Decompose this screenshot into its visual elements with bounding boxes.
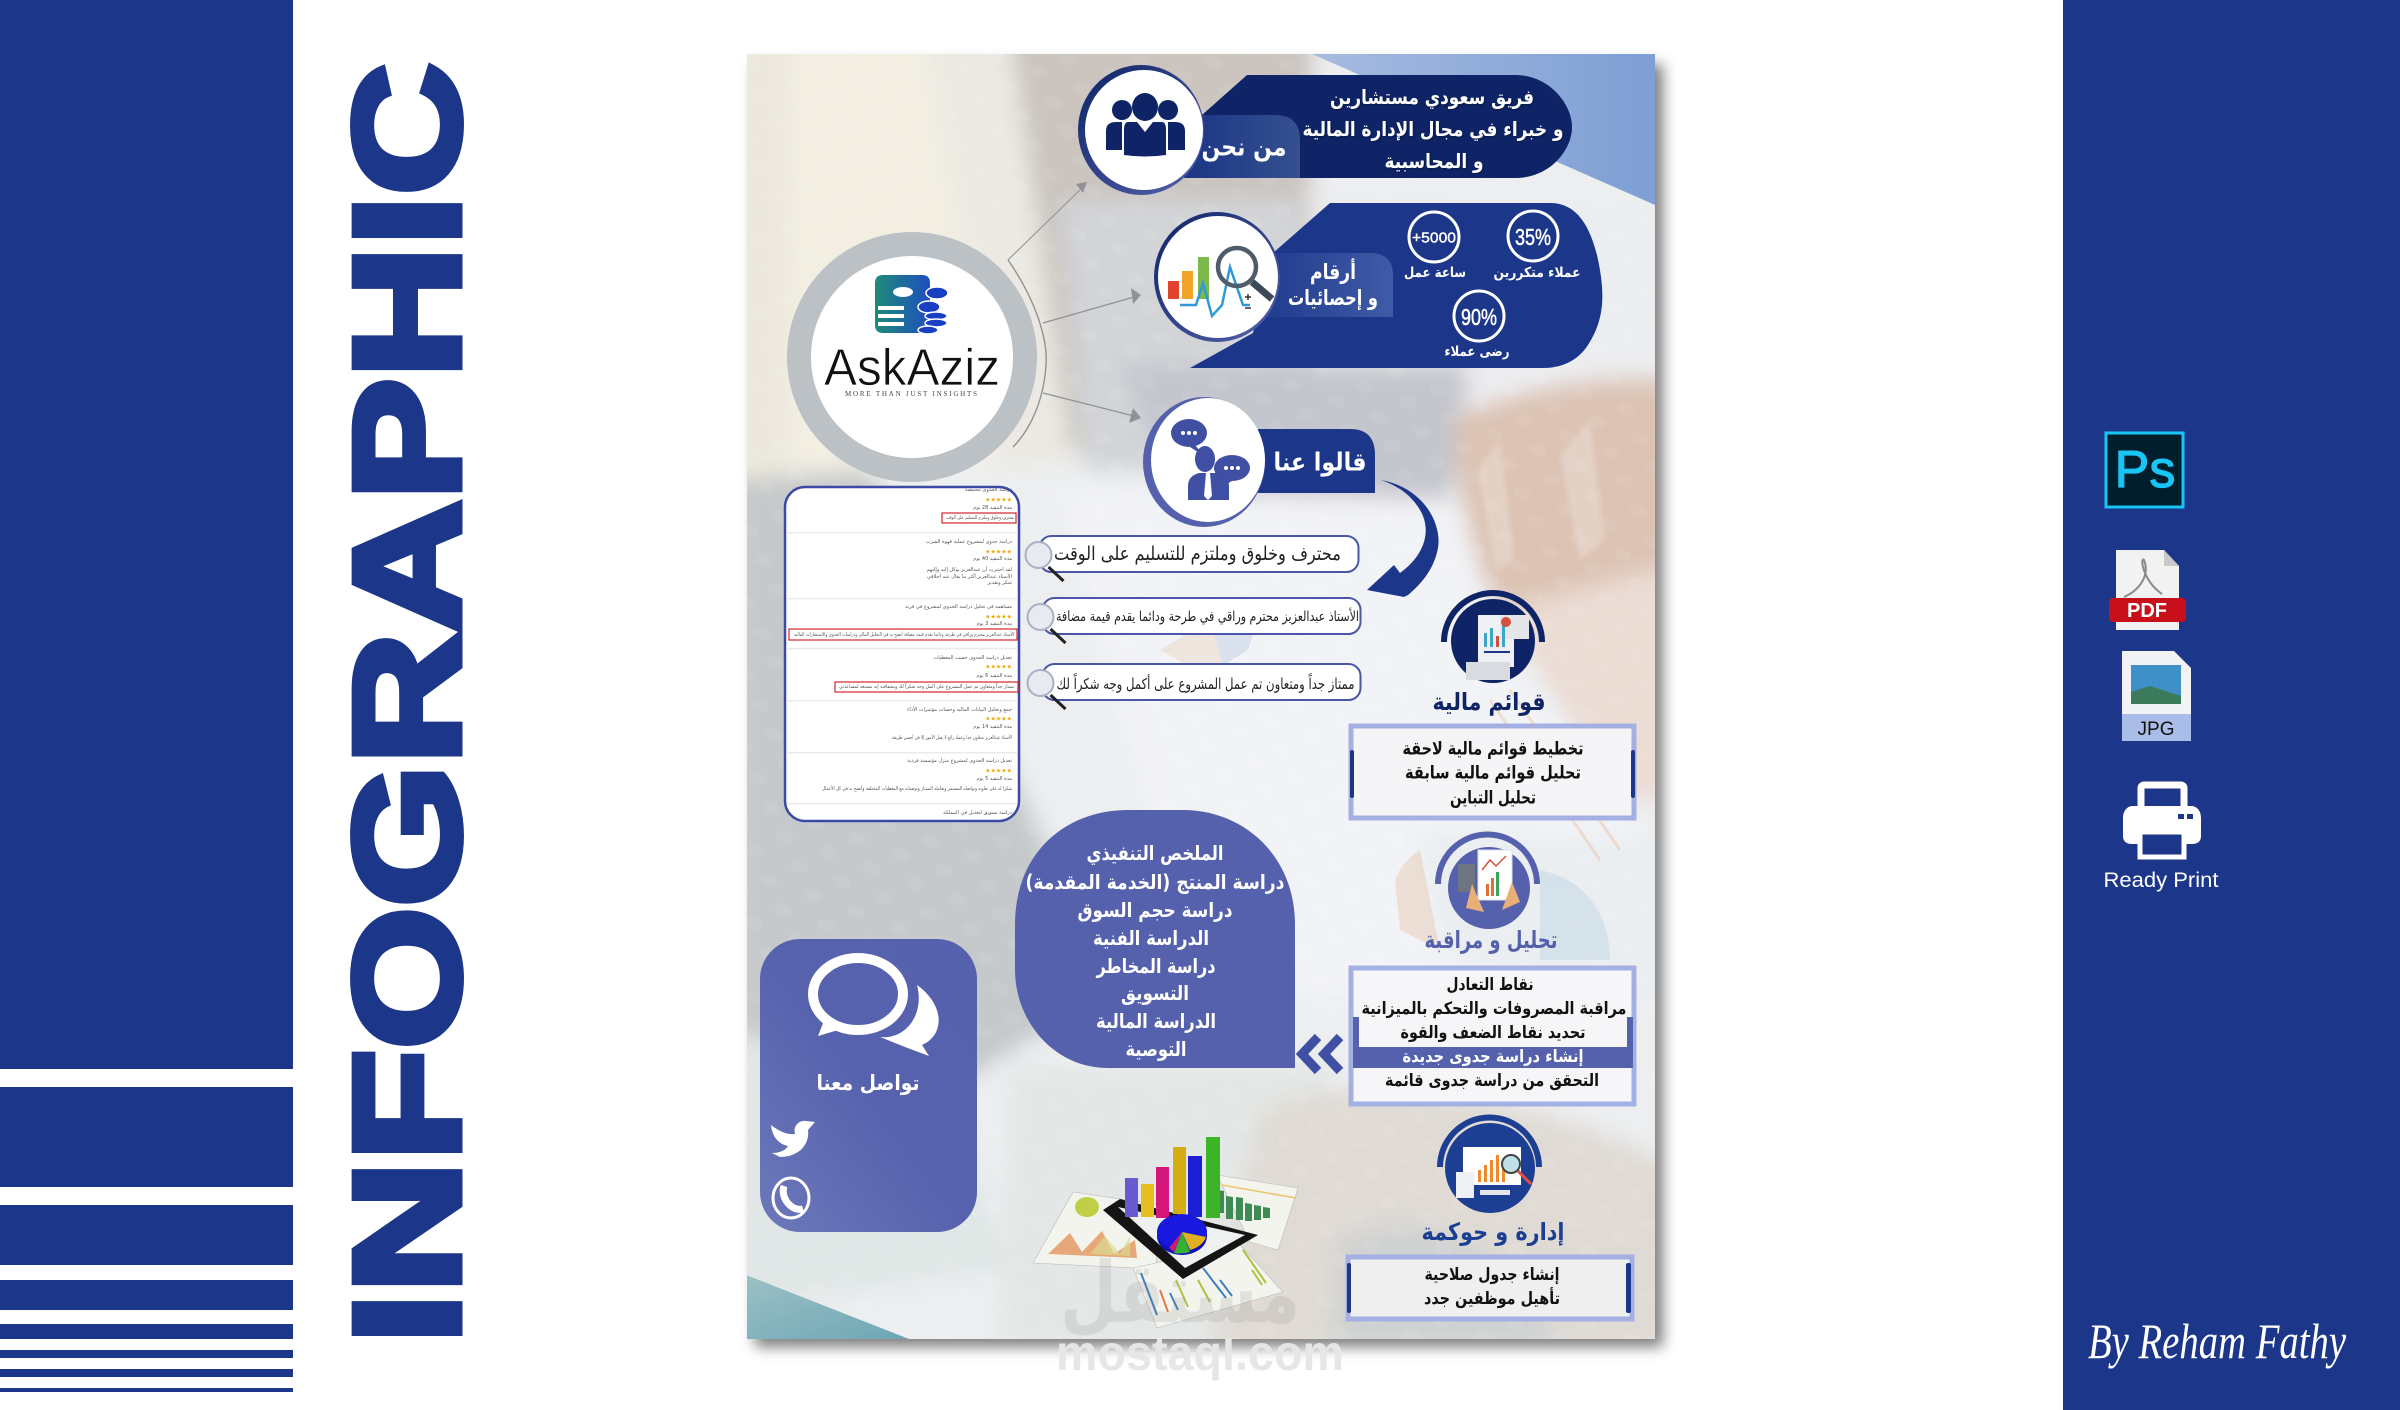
review list text: مدة التنفيذ 5 يوم [976, 776, 1012, 782]
logo tagline: MORE THAN JUST INSIGHTS [845, 390, 977, 398]
review list text: محترف وخلوق وملتزم للتسليم على الوقت [946, 515, 1014, 521]
stat: 5000 work hours [1404, 212, 1466, 281]
review list text: تعديل دراسة الجدوى لمشروع منزل مؤسسة فردية [907, 758, 1013, 764]
review highlight boxes [789, 513, 1018, 692]
stat: 35 percent repeat clients: 35% [1515, 224, 1551, 250]
background decoration: teal corner [746, 1275, 909, 1339]
callout: testimonial 3: ممتاز جداً ومتعاون تم عمل المشروع على أكمل وجه شكراً لك [1056, 673, 1354, 693]
icon: JPG file [2122, 651, 2191, 741]
background decoration: dots [747, 54, 1655, 1339]
panel: management and governance list: تأهيل موظفين جدد [1424, 1287, 1560, 1309]
text: about us description: فريق سعودي مستشارين [1330, 85, 1534, 110]
arrow: curved testimonial arrow [1367, 480, 1439, 597]
review list text: مدة التنفيذ 40 يوم [973, 556, 1012, 562]
review list text: ★★★★★ [985, 548, 1012, 556]
stat: 35 percent repeat clients [1494, 211, 1580, 281]
review list text: دراسة تسويق لتعديل في المملكة [943, 810, 1012, 816]
stat: 90 percent satisfaction: 90% [1461, 304, 1497, 330]
text: about us description: و خبراء في مجال الإدارة المالية [1302, 117, 1564, 142]
panel: feasibility study contents: الدراسة الفنية [1093, 926, 1209, 950]
icon: magnifier [1028, 670, 1066, 709]
icon: analysis and monitoring [1435, 832, 1540, 929]
icon: PDF file: PDF [2127, 600, 2167, 622]
stat: 90 percent satisfaction: رضى عملاء [1444, 344, 1510, 360]
callout: testimonial 2 [1028, 598, 1360, 643]
poster drop shadow [755, 64, 1663, 1347]
icon: financial statements [1441, 590, 1545, 683]
icon: Photoshop: Ps [2115, 441, 2175, 499]
review list text: مدة التنفيذ 28 يوم [973, 505, 1012, 511]
background decoration: faint charts [1160, 603, 1620, 960]
3D bars [1125, 1137, 1220, 1218]
review list text [794, 487, 1014, 816]
background decoration: blue corner [1312, 54, 1655, 205]
text: statistics title: أرقام [1310, 257, 1356, 284]
panel: analysis and monitoring list: مراقبة المصروفات والتحكم بالميزانية [1362, 999, 1626, 1019]
label: Ready Print: Ready Print [2104, 869, 2219, 892]
review list text: الأستاذ عبدالعزيز أكثر ما يقال عنه أخلاقي [927, 573, 1012, 580]
panel: feasibility study contents: التوصية [1126, 1037, 1186, 1061]
panel: financial statements list: تحليل قوائم مالية سابقة [1405, 762, 1581, 784]
panel: feasibility study contents: دراسة حجم السوق [1078, 898, 1232, 922]
logo circle [787, 232, 1037, 482]
panel: feasibility study contents [1015, 810, 1295, 1068]
icon: logo document and coins [875, 275, 948, 334]
chart paper left [1033, 1192, 1160, 1269]
review list text: مدة التنفيذ 6 يوم [976, 673, 1012, 679]
callout: testimonial 3 [1028, 664, 1360, 709]
stat: 35 percent repeat clients: عملاء متكررين [1494, 265, 1580, 281]
review list text: مدة التنفيذ 14 يوم [973, 724, 1012, 730]
panel: feasibility study contents: دراسة المنتج (الخدمة المقدمة) [1026, 870, 1284, 894]
list highlight band [1353, 1047, 1633, 1068]
panel: about us [1078, 65, 1572, 195]
stat: 5000 work hours: +5000 [1412, 230, 1456, 246]
panel: feasibility study contents: دراسة المخاطر [1096, 954, 1216, 978]
text: statistics title [1288, 257, 1378, 310]
text: about us description: و المحاسبية [1384, 149, 1484, 173]
watermark: mostaql logo: مستقل [1060, 1244, 1300, 1342]
icon: twitter bird [771, 1121, 815, 1157]
review list text: لقد اختبرت أن عبدالعزيز يوكل إليه وإليهم [927, 566, 1012, 573]
panel: management and governance list: إنشاء جدول صلاحية [1424, 1265, 1560, 1285]
panel: feasibility study contents: التسويق [1121, 981, 1189, 1005]
review list text: جمع وتحليل البيانات المالية وحساب مؤشرات الأداء [907, 706, 1012, 713]
text: about us description [1302, 85, 1564, 173]
icon: Photoshop [2106, 433, 2183, 507]
icon: magnifier [1026, 542, 1064, 581]
text: statistics title: و إحصائيات [1288, 286, 1378, 310]
3D pie [1157, 1214, 1207, 1255]
review list text: شكر وتقدير [987, 580, 1012, 586]
heading: financial statements: قوائم مالية [1432, 688, 1546, 716]
panel: feasibility study contents: الملخص التنفيذي [1086, 841, 1224, 866]
right blue sidebar [2063, 0, 2400, 1410]
review list text: الأستاذ عبدالعزيز متعاون جدا وعمله رائع لا يقبل الأمور إلا في أحسن طريقة [892, 734, 1012, 741]
callout: testimonial 1 [1026, 536, 1358, 581]
icon circle: people talking [1143, 397, 1265, 527]
icon: PDF file [2109, 550, 2186, 630]
chart paper right [1217, 1175, 1298, 1250]
review list text: الأستاذ عبدالعزيز محترم وراقي في طرحة ودائما يقدم قيمة مضافة أنصح به في التحليل المالي ودراسات الجدوى والاستشارات المالية [794, 631, 1014, 638]
text: about us title: من نحن [1202, 132, 1286, 162]
panel: analysis and monitoring list: تحديد نقاط الضعف والقوة [1400, 1023, 1586, 1043]
panel: testimonials header: قالوا عنا [1274, 448, 1366, 478]
heading: management and governance: إدارة و حوكمة [1422, 1218, 1564, 1246]
review list text: مدة التنفيذ 3 يوم [976, 621, 1012, 627]
panel: analysis and monitoring list: التحقق من دراسة جدوى قائمة [1385, 1071, 1599, 1091]
callout: testimonial 1: محترف وخلوق وملتزم للتسليم على الوقت [1054, 543, 1341, 565]
tab: about us label [1180, 115, 1300, 178]
icon: magnifier [1028, 604, 1066, 643]
text: contact us: تواصل معنا [816, 1071, 920, 1095]
icon: phone [773, 1178, 809, 1218]
panel: analysis and monitoring list: نقاط التعادل [1446, 975, 1534, 995]
tab: statistics label [1265, 253, 1393, 317]
review list text: ★★★★★ [985, 768, 1012, 774]
left blue striped sidebar [0, 0, 293, 1392]
review list text: ★★★★★ [985, 496, 1012, 504]
background decoration: fingers [1478, 420, 1604, 570]
review list text: ★★★★★ [985, 664, 1012, 670]
panel: financial statements list: تخطيط قوائم مالية لاحقة [1402, 738, 1584, 760]
review list text: ممتاز جداً ومتعاون تم عمل المشروع على أكمل وجه شكراً لك وبشفافية إنه مستعد لمساعدتي [839, 682, 1014, 690]
logo wordmark: AskAziz [824, 339, 1000, 397]
panel: reviews screenshot [785, 487, 1019, 821]
icon: printer [2123, 785, 2201, 857]
review list text: ★★★★★ [985, 716, 1012, 722]
panel: management and governance list [1347, 1257, 1632, 1319]
tablet [1103, 1199, 1258, 1279]
icon: chat bubbles [813, 958, 939, 1056]
panel: testimonials header [1143, 397, 1375, 527]
panel: contact us [760, 939, 977, 1232]
stat: 5000 work hours: ساعة عمل [1404, 265, 1466, 281]
review list text: ★★★★★ [985, 614, 1012, 620]
review list text: مساهمة في تحليل دراسة الجدوى لمشروع في قرية [905, 604, 1012, 610]
icon: management and governance [1437, 1115, 1542, 1213]
panel: financial statements list: تحليل التباين [1450, 788, 1536, 808]
icon circle: chart and magnifier [1154, 212, 1280, 342]
review list text: شكرا له على تعاونه وتواصله المستمر وتعامله الممتاز وتوصياته مع المعطيات المختلفة وأنصح به في كل الأعمال [822, 785, 1012, 792]
panel: financial statements list [1350, 726, 1635, 818]
panel: analysis and monitoring list [1351, 968, 1634, 1104]
chart paper bottom [1133, 1245, 1283, 1328]
callout: testimonial 2: الأستاذ عبدالعزيز محترم وراقي في طرحة ودائما يقدم قيمة مضافة [1056, 607, 1359, 625]
vertical title INFOGRAPHIC: INFOGRAPHIC [322, 63, 491, 1344]
review list text: دراسة الجدوى محمصة [965, 487, 1012, 493]
panel: feasibility study contents: الدراسة المالية [1096, 1009, 1216, 1033]
poster background photo wash [720, 30, 1690, 1350]
stat: 90 percent satisfaction [1444, 291, 1510, 360]
icon: JPG file: JPG [2138, 719, 2174, 740]
panel: numbers and statistics [1154, 203, 1602, 368]
review list text: تعديل دراسة الجدوى حسب المعطيات [934, 655, 1013, 661]
review list text: دراسة جدوى لمشروع عملية قهوة الشرب [926, 539, 1012, 545]
panel: analysis and monitoring list: إنشاء دراسة جدوى جديدة [1402, 1047, 1584, 1067]
icon circle: team [1078, 65, 1204, 195]
watermark: mostaql.com: mostaql.com [1056, 1325, 1344, 1381]
arrow: double chevrons [1302, 1037, 1340, 1071]
arrows from logo to sections [1008, 182, 1141, 447]
heading: analysis and monitoring: تحليل و مراقبة [1424, 926, 1558, 954]
illustration: tablet with 3D charts [1033, 1137, 1298, 1328]
